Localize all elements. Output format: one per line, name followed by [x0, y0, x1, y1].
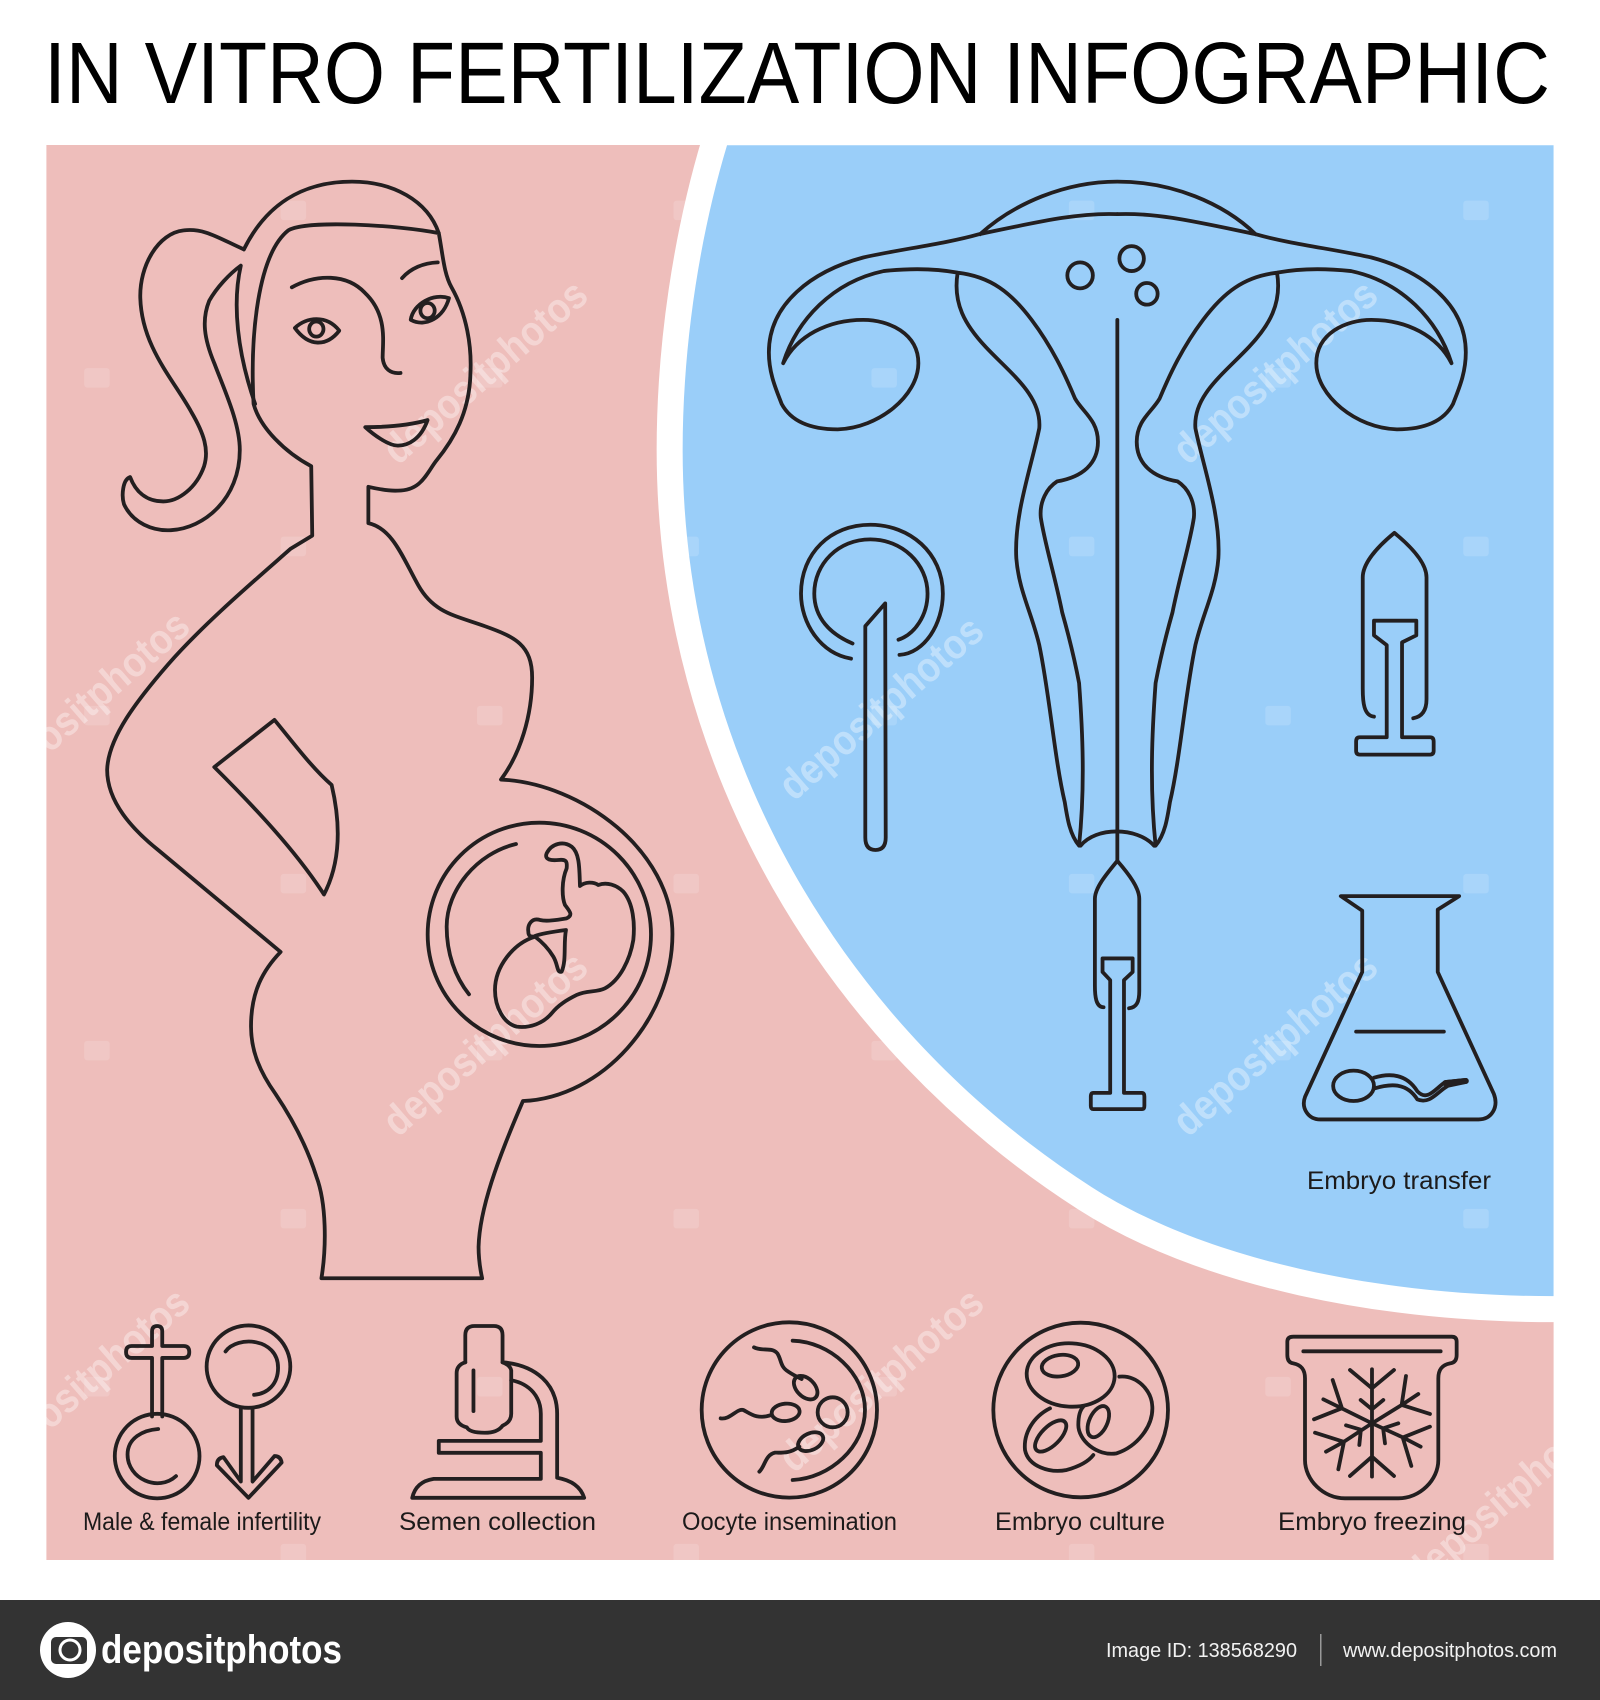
- left eye: [295, 319, 339, 343]
- watermarks: depositphotos: [373, 270, 596, 473]
- uterus diagram: [769, 182, 1495, 1119]
- ponytail: [123, 230, 255, 530]
- panel: blue curved area: [683, 145, 1554, 1296]
- footer url: www.depositphotos.com: [1342, 1640, 1557, 1662]
- watermarks: depositphotos: [769, 606, 992, 809]
- catheter line: [1115, 320, 1119, 862]
- watermark camera marks: [84, 201, 1489, 1563]
- label: embryo transfer: Embryo transfer: [1307, 1167, 1491, 1195]
- footer bar: [0, 1600, 1600, 1700]
- left pupil: [309, 321, 323, 337]
- footer divider: [1320, 1634, 1322, 1666]
- label: male and female infertility: Male & female infertility: [83, 1508, 321, 1536]
- fetus: [495, 843, 634, 1027]
- label: semen collection: Semen collection: [399, 1508, 596, 1536]
- arm gap: [214, 720, 338, 894]
- embryo dots: [1067, 246, 1158, 305]
- right pupil: [420, 303, 435, 318]
- icon: embryo culture: [993, 1323, 1168, 1497]
- footer image id: Image ID: 138568290: [1106, 1640, 1297, 1662]
- logo lens: [60, 1640, 80, 1660]
- mouth: [365, 420, 428, 446]
- right brow: [402, 262, 438, 278]
- right eye: [411, 297, 449, 323]
- footer logo: [40, 1622, 342, 1678]
- label: embryo freezing: Embryo freezing: [1278, 1508, 1466, 1536]
- icon: oocyte insemination: [702, 1322, 877, 1498]
- nose and brow: [292, 278, 401, 373]
- watermarks: depositphotos: [1163, 270, 1386, 473]
- logo wordmark: depositphotos: [101, 1628, 342, 1672]
- figure: pregnant woman: [107, 182, 672, 1278]
- icon: right syringe: [1356, 533, 1434, 755]
- uterus right half: [1117, 214, 1466, 846]
- uterus left half: [769, 214, 1117, 846]
- logo camera: [51, 1637, 87, 1664]
- icon: microscope: [412, 1326, 584, 1498]
- uterus dome: [980, 182, 1256, 234]
- icon: flask with embryo: [1304, 896, 1495, 1119]
- cervix arc: [1081, 831, 1154, 846]
- womb circle: [428, 823, 651, 1046]
- logo badge: [40, 1622, 96, 1678]
- womb with fetus: [428, 823, 651, 1046]
- watermarks: depositphotos: [769, 1278, 992, 1481]
- label: oocyte insemination: Oocyte insemination: [682, 1508, 897, 1536]
- watermarks: depositphotos: [1163, 942, 1386, 1145]
- icon: embryo freezing: [1287, 1337, 1457, 1498]
- label: embryo culture: Embryo culture: [995, 1508, 1165, 1536]
- icon: ring and rod: [801, 525, 943, 850]
- icon: gender symbols: [115, 1325, 290, 1498]
- inner womb arc: [447, 844, 516, 994]
- watermarks: [0, 270, 1600, 1597]
- body and head outline: [107, 182, 672, 1278]
- watermarks: depositphotos: [373, 942, 596, 1145]
- panel: pink background: [46, 145, 1554, 1560]
- icon: central syringe: [1091, 861, 1144, 1109]
- fetus arm: [535, 930, 566, 972]
